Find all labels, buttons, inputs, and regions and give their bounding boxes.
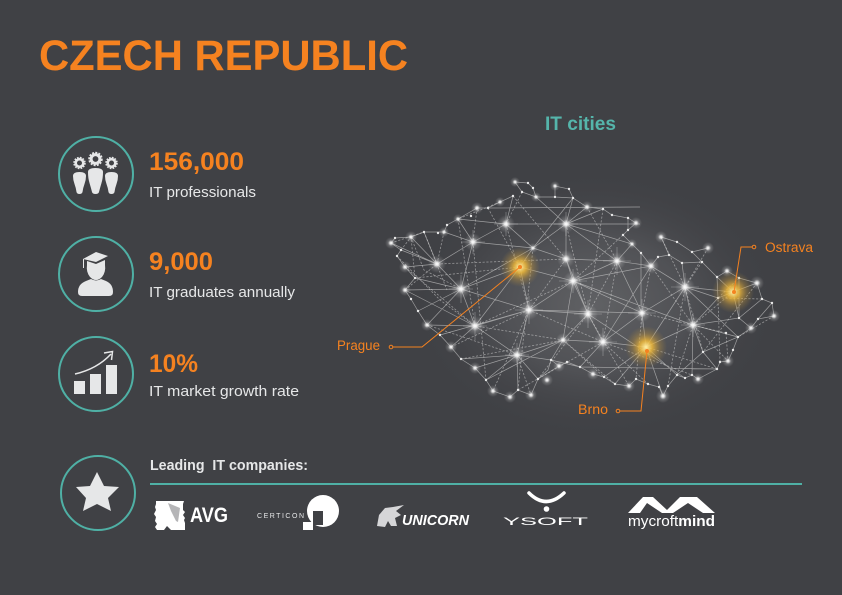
logo: AVG: AVG	[190, 504, 228, 527]
stat: market growth	[59, 337, 299, 411]
stat: IT professionals	[59, 137, 256, 211]
city: Brno: Brno	[578, 402, 608, 417]
icon: people with gears	[59, 137, 133, 211]
label: IT graduates annually	[149, 284, 295, 301]
figure: 9,000	[149, 248, 213, 276]
logo: Mycroft Mind: mycroftmind	[628, 514, 715, 530]
icon: growth chart	[59, 337, 133, 411]
star flares	[449, 212, 705, 367]
panel: leading IT companies	[61, 456, 802, 530]
label: IT market growth rate	[149, 383, 299, 400]
logo: Certicon	[257, 495, 339, 530]
city: Prague	[337, 247, 540, 353]
figure: 10%	[149, 350, 198, 378]
logo: YSoft: YSOFT	[503, 516, 589, 528]
title: CZECH REPUBLIC	[39, 32, 408, 80]
small map nodes	[394, 182, 773, 391]
stat: IT graduates	[59, 237, 295, 311]
heading: Leading IT companies:	[150, 458, 308, 474]
figure: 156,000	[149, 148, 244, 176]
logo: Certicon: CERTICON	[257, 513, 304, 520]
logo: Mycroft Mind	[628, 497, 715, 530]
logo: AVG	[154, 501, 228, 530]
city: Ostrava	[712, 240, 813, 313]
white node glows	[385, 177, 780, 403]
label: IT professionals	[149, 184, 256, 201]
city: Ostrava: Ostrava	[765, 240, 813, 255]
city: Brno	[578, 326, 667, 417]
icon: graduate	[59, 237, 133, 311]
logo: YSoft	[503, 493, 589, 528]
logo: Unicorn	[377, 505, 470, 529]
logo: Unicorn: UNICORN	[402, 512, 470, 529]
map: IT cities network	[337, 170, 813, 440]
icon: star	[61, 456, 135, 530]
map heading: IT cities	[545, 114, 616, 135]
city: Prague: Prague	[337, 338, 380, 353]
